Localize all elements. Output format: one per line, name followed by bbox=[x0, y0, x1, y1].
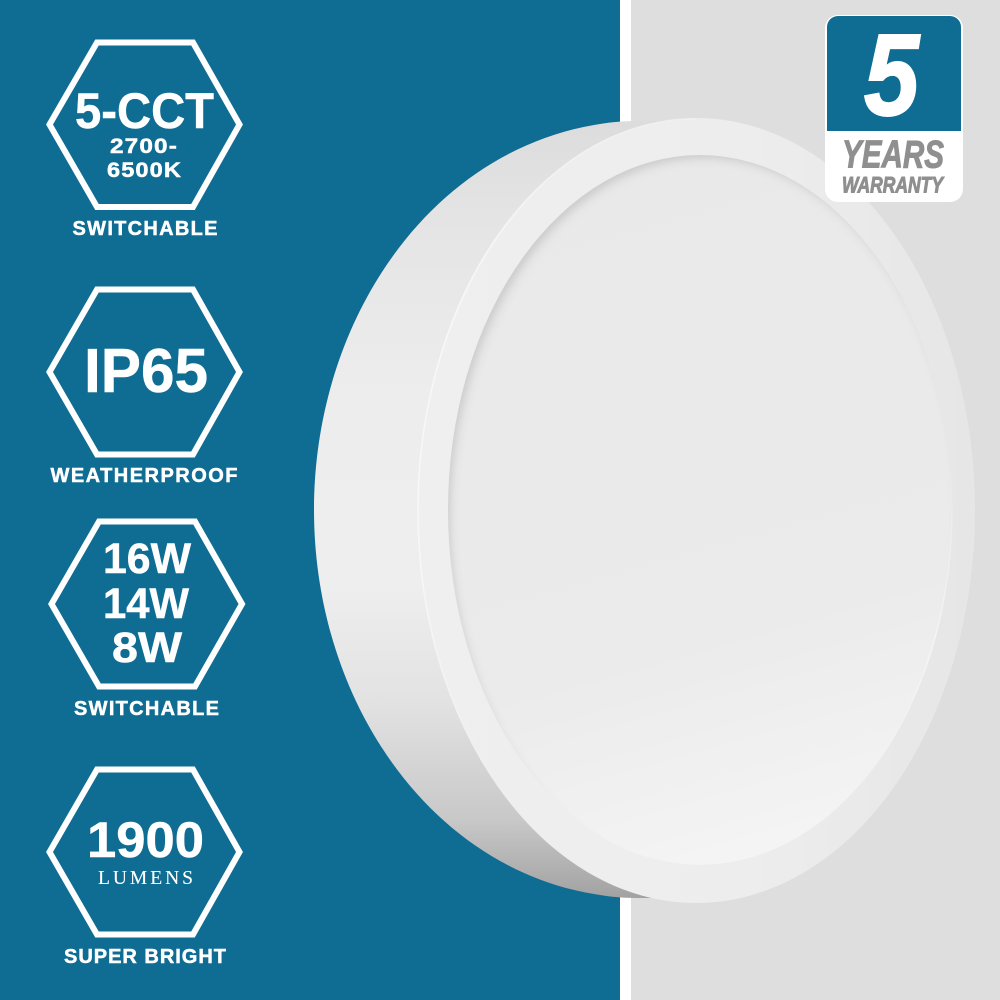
panel: grey right background bbox=[631, 0, 1000, 1000]
caption: SUPER BRIGHT bbox=[64, 946, 226, 968]
feature: IP65 bbox=[50, 290, 240, 487]
hexagon outline bbox=[50, 290, 240, 454]
caption: WEATHERPROOF bbox=[50, 465, 238, 487]
IP65 heading: IP65 bbox=[84, 337, 208, 406]
lamp diffuser panel bbox=[448, 155, 902, 842]
badge: 5 years warranty bbox=[825, 10, 963, 202]
panel: teal left background bbox=[0, 0, 620, 1000]
hexagon outline bbox=[50, 42, 240, 207]
feature: wattage bbox=[52, 522, 242, 720]
ring highlight edge bbox=[418, 119, 696, 902]
1900 heading: 1900 bbox=[87, 812, 204, 868]
hexagon outline bbox=[52, 522, 242, 686]
lamp front ring bbox=[417, 118, 975, 903]
badge teal header bbox=[827, 16, 961, 131]
badge text YEARS: YEARS bbox=[842, 134, 944, 176]
colour temperature range line 1: 2700- bbox=[110, 135, 178, 158]
8W: 8W bbox=[112, 624, 182, 672]
badge number 5: 5 bbox=[864, 10, 920, 140]
product: round LED ceiling light bbox=[314, 118, 975, 903]
badge text WARRANTY: WARRANTY bbox=[842, 172, 945, 198]
diffuser rim highlight bbox=[765, 448, 952, 853]
16W: 16W bbox=[103, 535, 191, 583]
caption: SWITCHABLE bbox=[74, 698, 219, 720]
hexagon outline bbox=[50, 770, 240, 934]
feature: lumens bbox=[50, 770, 240, 968]
badge white card bbox=[825, 15, 963, 202]
white divider strip bbox=[620, 0, 631, 1000]
feature: 5-CCT bbox=[50, 42, 240, 240]
colour temperature range line 2: 6500K bbox=[107, 159, 182, 182]
caption: SWITCHABLE bbox=[72, 218, 218, 240]
14W: 14W bbox=[103, 580, 189, 628]
LUMENS: LUMENS bbox=[98, 868, 193, 889]
5-CCT heading: 5-CCT bbox=[75, 83, 214, 139]
lamp side wall bbox=[314, 121, 700, 898]
